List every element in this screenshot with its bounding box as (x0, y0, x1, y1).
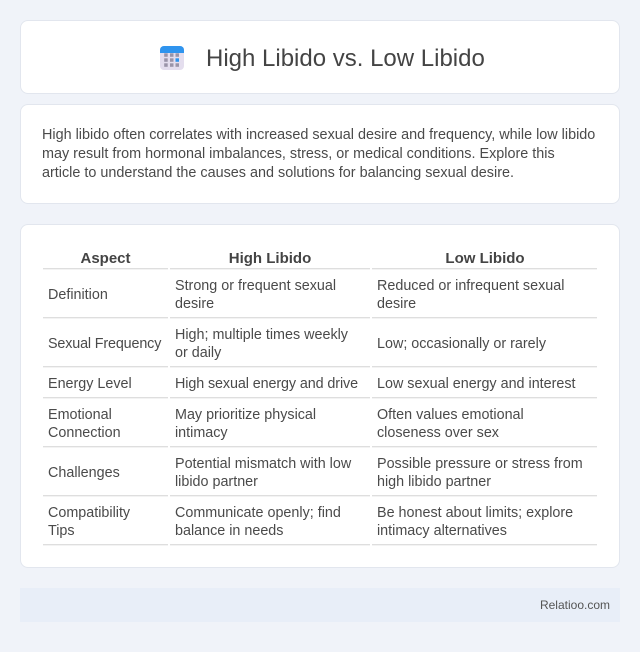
panel: introduction (20, 104, 620, 204)
row: Definition: desire (377, 296, 416, 312)
table header: Aspect (80, 250, 131, 267)
row: Definition: Definition (48, 287, 108, 303)
row: Sexual Frequency: Low; occasionally or rarely (377, 336, 546, 352)
row: Compatibility Tips: Communicate openly; find (175, 505, 341, 521)
row: Compatibility Tips: Be honest about limits; explore (377, 505, 573, 521)
row: Emotional Connection: Often values emotional (377, 407, 524, 423)
row: Definition: Strong or frequent sexual (175, 278, 336, 294)
panel: title card (20, 20, 620, 94)
intro text (42, 127, 595, 181)
row: Challenges (48, 456, 583, 490)
row: Emotional Connection: Emotional (48, 407, 112, 423)
row: Energy Level: Energy Level (48, 376, 132, 392)
row: Challenges: Potential mismatch with low (175, 456, 351, 472)
row: Sexual Frequency (48, 327, 546, 361)
row: Challenges: Possible pressure or stress from (377, 456, 583, 472)
row: Sexual Frequency: High; multiple times weekly (175, 327, 348, 343)
row: Emotional Connection: closeness over sex (377, 425, 499, 441)
intro text: article to understand the causes and solutions for balancing sexual desire. (42, 165, 514, 181)
table header (80, 250, 525, 267)
title: High Libido vs. Low Libido (206, 45, 485, 72)
intro text: may result from hormonal imbalances, stress, or medical conditions. Explore this (42, 146, 555, 162)
intro text: High libido often correlates with increased sexual desire and frequency, while low libido (42, 127, 595, 143)
row: Sexual Frequency: or daily (175, 345, 221, 361)
row: Definition: desire (175, 296, 214, 312)
table header: High Libido (229, 250, 311, 267)
panel: comparison table (20, 224, 620, 568)
row: Compatibility Tips: balance in needs (175, 523, 283, 539)
row: Compatibility Tips (48, 505, 573, 539)
row: Definition: Reduced or infrequent sexual (377, 278, 564, 294)
table header: Low Libido (445, 250, 525, 267)
row: Challenges: high libido partner (377, 474, 491, 490)
row: Sexual Frequency: Sexual Frequency (48, 336, 161, 352)
row: Energy Level (48, 376, 576, 392)
row: Compatibility Tips: intimacy alternatives (377, 523, 507, 539)
row: Challenges: libido partner (175, 474, 258, 490)
row: Energy Level: Low sexual energy and interest (377, 376, 576, 392)
icon: calendar (160, 46, 184, 70)
row: Challenges: Challenges (48, 465, 120, 481)
footer bar (20, 588, 620, 622)
row: Emotional Connection (48, 407, 524, 441)
footer credit: Relatioo.com (540, 598, 610, 612)
row: Compatibility Tips: Compatibility (48, 505, 130, 521)
row: Compatibility Tips: Tips (48, 523, 75, 539)
row: Emotional Connection: intimacy (175, 425, 228, 441)
row: Emotional Connection: May prioritize physical (175, 407, 316, 423)
row: Energy Level: High sexual energy and drive (175, 376, 358, 392)
row: Definition (48, 278, 564, 312)
row: Emotional Connection: Connection (48, 425, 121, 441)
